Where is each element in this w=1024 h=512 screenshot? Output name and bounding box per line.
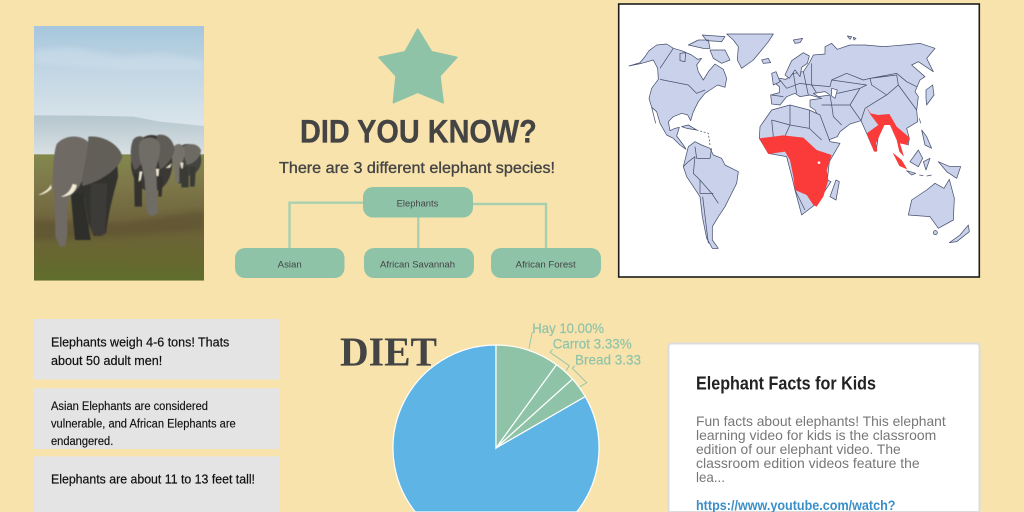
- card description: lea...: [696, 469, 725, 485]
- australia: [908, 179, 954, 228]
- label: hay: Hay 10.00%: [532, 320, 604, 336]
- fact card: height: Elephants are about 11 to 13 feet tall!: [51, 473, 255, 487]
- node: african savannah: [364, 248, 474, 278]
- fact card: conservation: [34, 388, 280, 449]
- fact card: weight: Elephants weigh 4-6 tons! Thats: [51, 336, 229, 350]
- slice: other: [393, 345, 599, 512]
- node: african forest: [491, 248, 601, 278]
- node: elephants: [363, 187, 473, 218]
- fact card: conservation: vulnerable, and African Elephants are: [51, 419, 236, 431]
- new zealand: [949, 225, 969, 243]
- africa range: [759, 135, 832, 207]
- icon: star: [379, 29, 457, 103]
- americas: [629, 34, 773, 248]
- africa: [759, 105, 840, 215]
- label: bread: Bread 3.33: [575, 352, 641, 368]
- eurasia: [771, 43, 935, 152]
- fact card: weight: about 50 adult men!: [51, 354, 162, 368]
- eurasia africa oceania: [759, 36, 969, 243]
- heading: diet: DIET: [340, 329, 437, 375]
- slice: hay: [496, 345, 556, 448]
- label: carrot: Carrot 3.33%: [553, 336, 632, 352]
- card description: learning video for kids is the classroom: [696, 427, 936, 443]
- world map: elephant range: [619, 4, 979, 277]
- card description: classroom edition videos feature the: [696, 455, 920, 471]
- node: african savannah: African Savannah: [380, 260, 455, 270]
- photo: elephants walking on grassland: [34, 26, 204, 281]
- card description: [696, 413, 946, 485]
- title: did you know: DID YOU KNOW?: [300, 114, 537, 150]
- node: elephants: Elephants: [397, 199, 439, 209]
- subtitle: There are 3 different elephant species!: [279, 160, 555, 177]
- card description: edition of our elephant video. The: [696, 441, 901, 457]
- far elephant: [180, 143, 202, 176]
- fact card: conservation: endangered.: [51, 436, 113, 448]
- node: african forest: African Forest: [516, 260, 576, 270]
- madagascar: [830, 180, 839, 200]
- node: asian: Asian: [278, 260, 302, 270]
- east asian islands: [926, 85, 934, 105]
- front elephant: [70, 166, 119, 236]
- fact card: height: [34, 456, 280, 512]
- leader lines: [529, 332, 587, 387]
- fact card: weight: [34, 319, 280, 380]
- video link card: [668, 344, 980, 512]
- fact card: conservation: Asian Elephants are considered: [51, 401, 208, 413]
- node: asian: [235, 248, 344, 278]
- pie chart: diet: [393, 320, 641, 512]
- middle elephant: [131, 135, 172, 192]
- slice: carrot: [496, 365, 572, 448]
- card heading: Elephant Facts for Kids: [696, 373, 876, 393]
- org chart: elephant species: [235, 187, 601, 278]
- slice: bread: [496, 379, 585, 448]
- card description: Fun facts about elephants! This elephant: [696, 413, 946, 429]
- asia range: [866, 107, 909, 157]
